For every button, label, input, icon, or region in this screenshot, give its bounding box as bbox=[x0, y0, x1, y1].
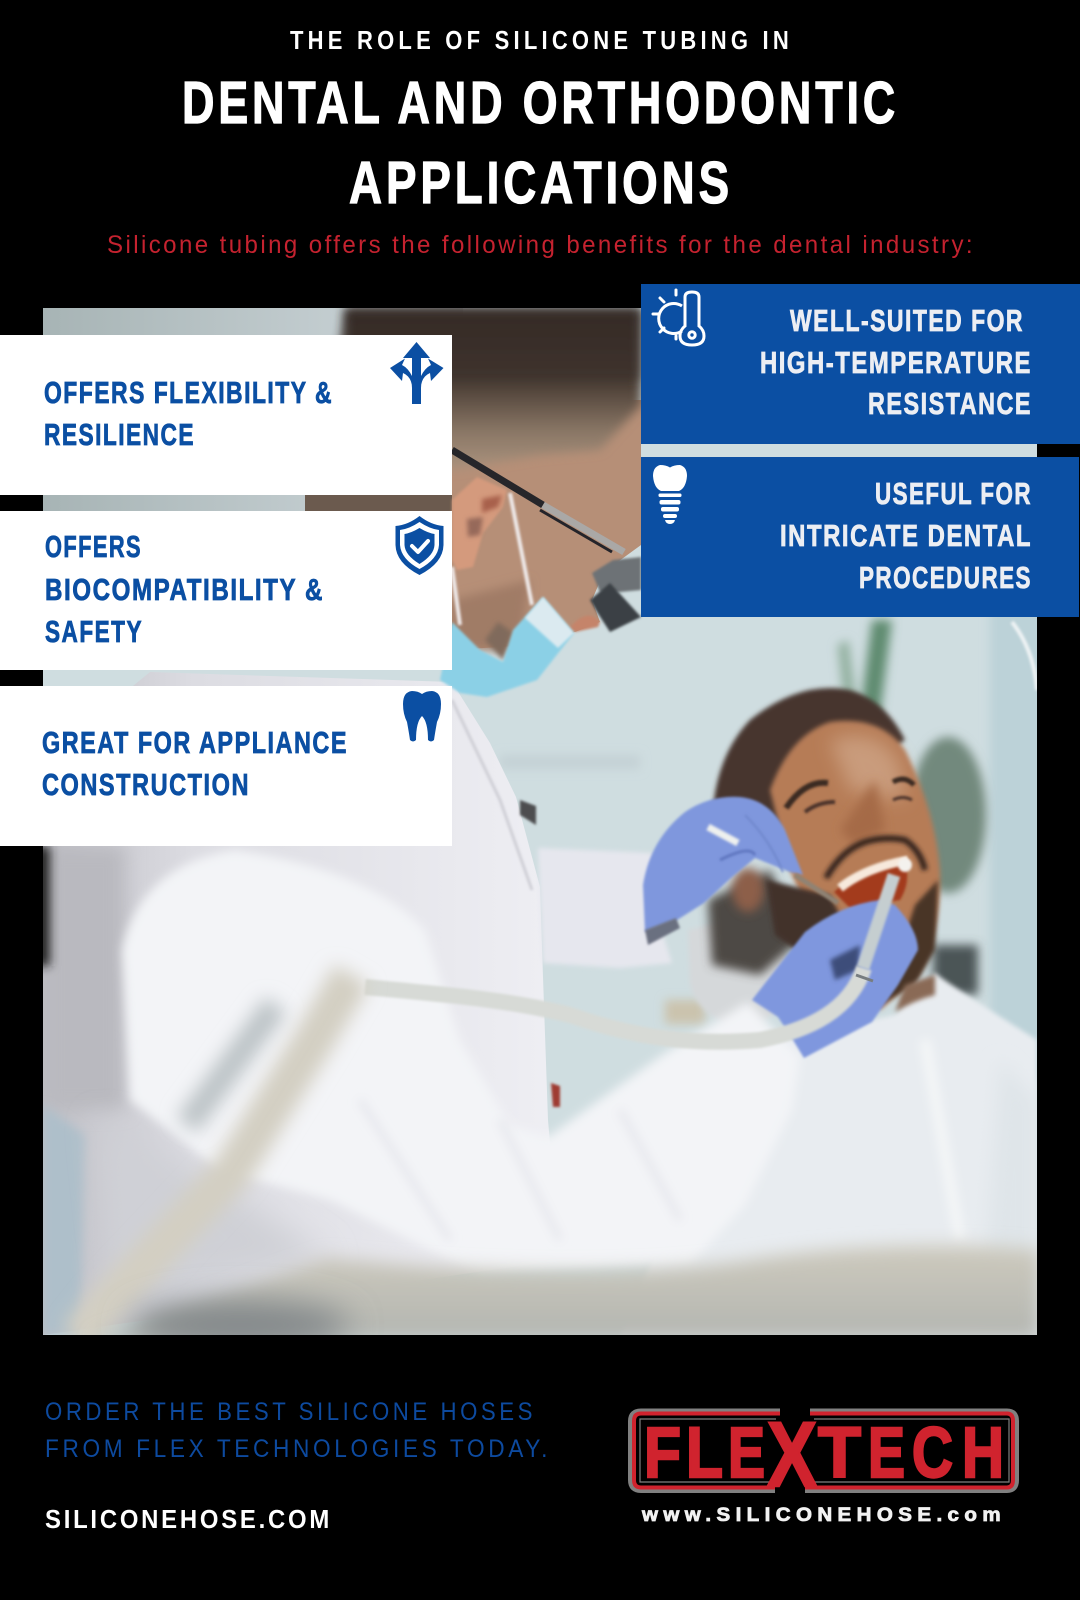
dentist near arm bbox=[122, 850, 800, 1275]
label: high-temperature resistance: RESISTANCE bbox=[868, 386, 1032, 421]
logo wordmark: E bbox=[728, 1414, 765, 1493]
label: appliance construction: CONSTRUCTION bbox=[42, 767, 250, 802]
label: biocompatibility: OFFERS bbox=[45, 529, 142, 564]
hair bbox=[344, 308, 641, 470]
loupes bbox=[592, 557, 641, 592]
panel: biocompatibility bbox=[0, 511, 452, 670]
logo wordmark: T bbox=[818, 1414, 861, 1493]
dentist coat bbox=[32, 672, 560, 1335]
logo: FlexTech bbox=[631, 1404, 1016, 1526]
logo wordmark: X bbox=[767, 1404, 817, 1506]
logo wordmark: E bbox=[868, 1414, 905, 1493]
logo wordmark: L bbox=[686, 1414, 723, 1493]
patient chair and hair back bbox=[688, 688, 905, 1030]
label: intricate dental procedures bbox=[780, 476, 1032, 595]
dentist far sleeve bbox=[538, 848, 672, 968]
nose bbox=[570, 616, 600, 632]
main title bbox=[182, 70, 899, 216]
glasses bbox=[452, 450, 543, 505]
plants bbox=[838, 620, 986, 995]
patient face bbox=[732, 721, 940, 1010]
dentist head bbox=[305, 308, 641, 697]
order text bbox=[45, 1398, 551, 1463]
jaw shadow bbox=[485, 622, 512, 660]
website: SILICONEHOSE.COM bbox=[45, 1504, 332, 1534]
mask straps bbox=[452, 493, 532, 625]
ear bbox=[452, 477, 507, 570]
label: biocompatibility: BIOCOMPATIBILITY & bbox=[45, 572, 324, 607]
label: flexibility bbox=[44, 375, 333, 452]
face mask bbox=[440, 597, 574, 697]
icon: dental implant bbox=[653, 465, 687, 524]
label: appliance construction: GREAT FOR APPLIANCE bbox=[42, 725, 348, 760]
header bbox=[107, 25, 975, 259]
label: appliance construction bbox=[42, 725, 348, 802]
panel: intricate dental procedures bbox=[641, 457, 1079, 617]
panel: high-temperature resistance bbox=[641, 284, 1080, 444]
photo: dentist treating patient bbox=[32, 308, 1050, 1350]
logo wordmark: C bbox=[912, 1414, 953, 1493]
icon: shield check bbox=[396, 516, 444, 575]
icon: sun and thermometer bbox=[653, 290, 704, 345]
logo frame bbox=[631, 1412, 1016, 1490]
call to action bbox=[45, 1398, 551, 1534]
label: flexibility: RESILIENCE bbox=[44, 417, 195, 452]
order text: ORDER THE BEST SILICONE HOSES bbox=[45, 1398, 536, 1426]
hair in strip between panels bbox=[305, 495, 452, 511]
panel: flexibility bbox=[0, 335, 452, 495]
label: high-temperature resistance bbox=[760, 303, 1032, 421]
panel: appliance construction bbox=[0, 686, 452, 846]
order text: FROM FLEX TECHNOLOGIES TODAY. bbox=[45, 1435, 551, 1463]
label: flexibility: OFFERS FLEXIBILITY & bbox=[44, 375, 333, 410]
eyebrow title: THE ROLE OF SILICONE TUBING IN bbox=[290, 25, 793, 55]
face bbox=[452, 400, 641, 650]
logo url: www.SILICONEHOSE.com bbox=[641, 1505, 1006, 1526]
logo wordmark bbox=[644, 1404, 1004, 1506]
wall bbox=[43, 308, 1050, 1335]
gloves bbox=[643, 797, 918, 1058]
icon: tooth bbox=[403, 691, 441, 742]
logo wordmark: H bbox=[962, 1414, 1004, 1493]
label: biocompatibility bbox=[45, 529, 324, 649]
icon: three-way arrows bbox=[390, 342, 444, 404]
patient bib bbox=[652, 971, 1037, 1272]
logo wordmark: F bbox=[644, 1414, 681, 1493]
label: biocompatibility: SAFETY bbox=[45, 614, 143, 649]
dental tube and handpiece bbox=[365, 827, 894, 1042]
subtitle: Silicone tubing offers the following benefits for the dental industry: bbox=[107, 231, 975, 259]
blurred foreground instrument bbox=[78, 975, 1040, 1350]
main title: APPLICATIONS bbox=[349, 150, 733, 216]
